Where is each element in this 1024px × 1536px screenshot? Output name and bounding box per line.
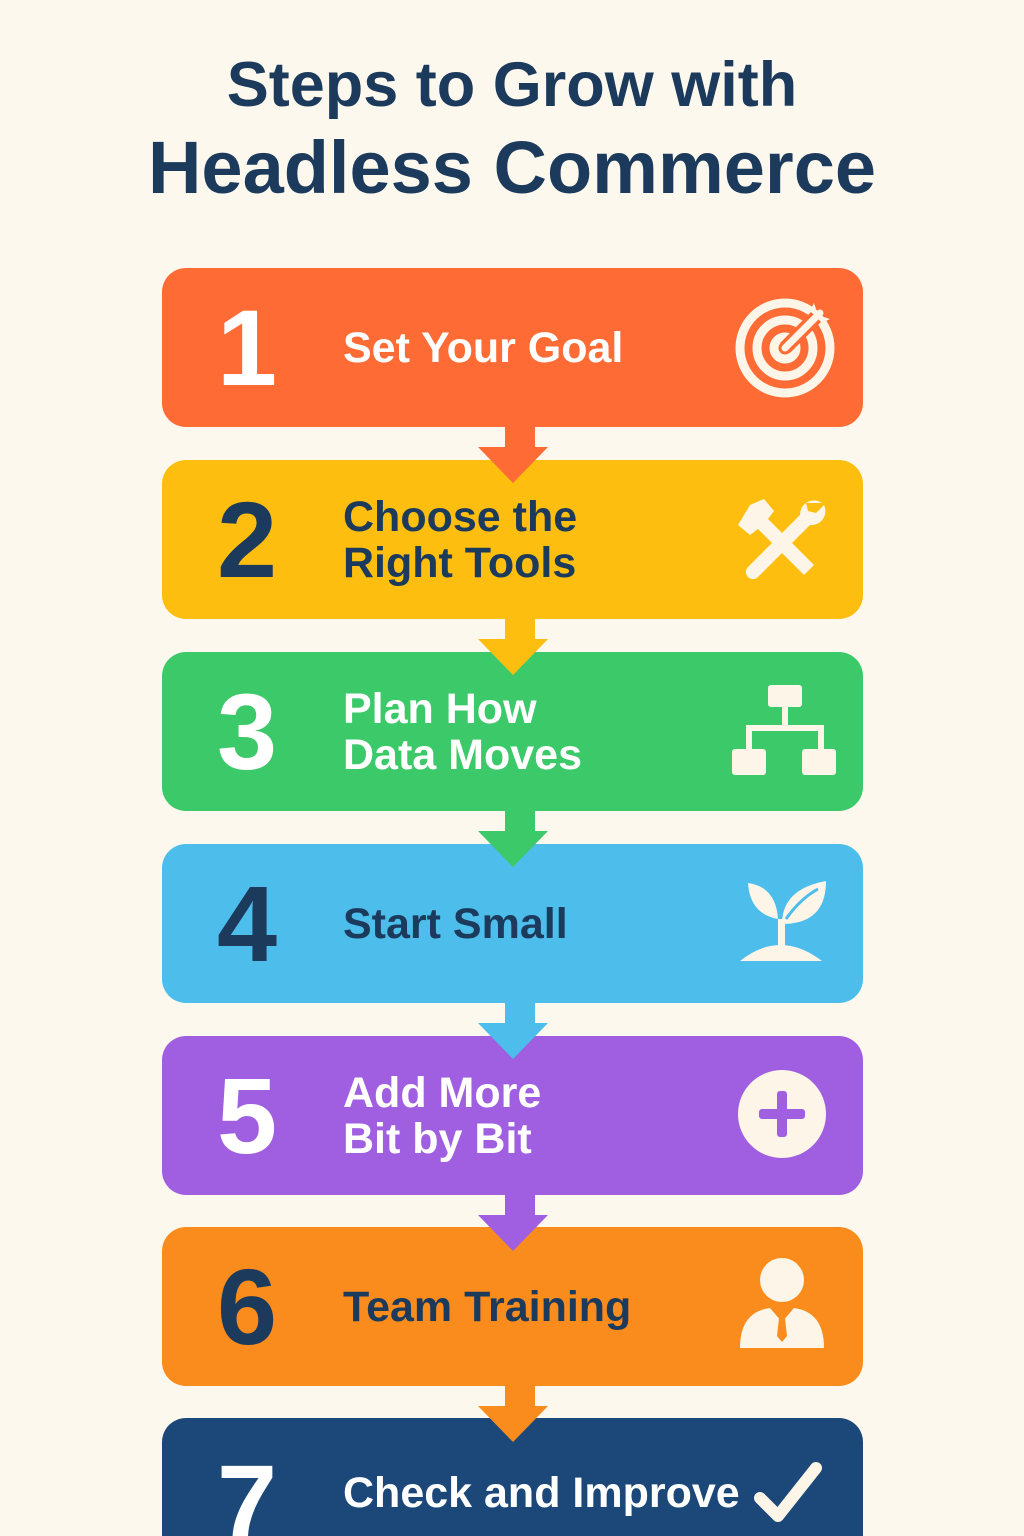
step 4: Start Small [343, 900, 568, 948]
step 3: Plan How [343, 684, 537, 732]
arrow 1 [478, 427, 548, 483]
step 6: Team Training [343, 1282, 631, 1330]
step 3 [162, 652, 863, 811]
icon: hierarchy [732, 685, 836, 775]
step 1: Set Your Goal [343, 324, 623, 372]
title: Headless Commerce [148, 126, 876, 209]
step 2: Right Tools [343, 538, 576, 586]
icon: plus [738, 1070, 826, 1158]
step 5: Bit by Bit [343, 1114, 532, 1162]
step 7: Check and Improve [343, 1469, 740, 1517]
arrow 3 [478, 811, 548, 867]
step 6 [162, 1227, 863, 1386]
icon: target [736, 298, 834, 398]
icon: check [754, 1462, 822, 1522]
step 7 [162, 1418, 863, 1536]
arrow 6 [478, 1386, 548, 1442]
arrow 5 [478, 1195, 548, 1251]
step 2: 2 [217, 479, 277, 600]
step 2 [162, 460, 863, 619]
title [148, 50, 876, 209]
step 6: 6 [217, 1246, 277, 1367]
step 5: Add More [343, 1068, 541, 1116]
arrow 4 [478, 1003, 548, 1059]
step 5 [162, 1036, 863, 1195]
step 3: 3 [217, 671, 277, 792]
step 5: 5 [217, 1055, 277, 1176]
step 4 [162, 844, 863, 1003]
icon: person [740, 1258, 824, 1348]
step 3: Data Moves [343, 730, 582, 778]
step 1 [162, 268, 863, 427]
arrow 2 [478, 619, 548, 675]
step 4: 4 [217, 863, 277, 984]
title: Steps to Grow with [227, 50, 797, 120]
icon: tools [738, 499, 826, 580]
step 2: Choose the [343, 492, 577, 540]
icon: sprout [740, 881, 826, 961]
step 1: 1 [217, 287, 277, 408]
